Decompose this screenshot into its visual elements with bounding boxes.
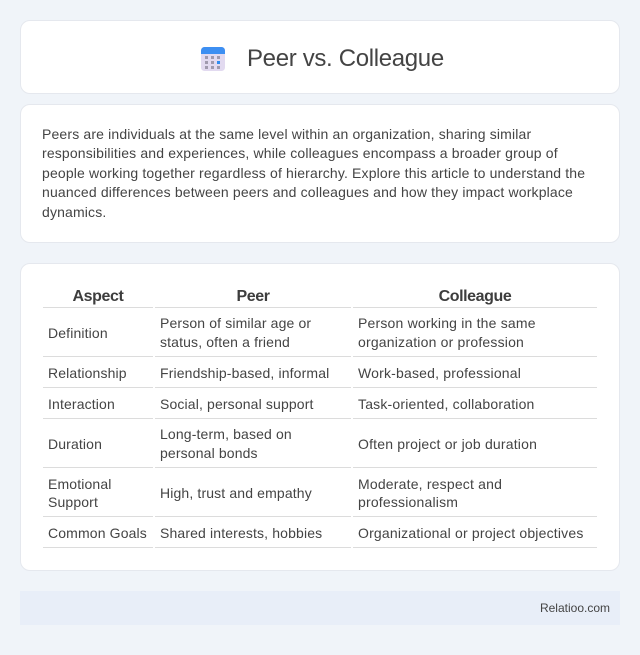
table header: Aspect [73, 288, 123, 305]
row: interaction: Interaction [48, 396, 115, 412]
panel: title card [20, 20, 620, 94]
row: definition: Definition [48, 325, 108, 341]
row: duration: personal bonds [160, 445, 258, 461]
row: interaction: Social, personal support [160, 396, 314, 412]
table header [72, 288, 512, 305]
row: duration [48, 426, 537, 461]
row: common goals [48, 525, 584, 541]
text block: introduction: responsibilities and experiences, while colleagues encompass a broader group of [42, 145, 558, 161]
row: definition: status, often a friend [160, 334, 290, 350]
row: relationship [48, 365, 521, 381]
row: emotional support: Emotional [48, 476, 112, 492]
row: definition [48, 315, 536, 350]
row: emotional support: Moderate, respect and [358, 476, 502, 492]
row: duration: Duration [48, 436, 102, 452]
row: relationship: Work-based, professional [358, 365, 521, 381]
row: emotional support: professionalism [358, 494, 458, 510]
footer credit: Relatioo.com [540, 601, 610, 615]
row: emotional support: High, trust and empathy [160, 485, 312, 501]
row: common goals: Shared interests, hobbies [160, 525, 322, 541]
title: Peer vs. Colleague [247, 45, 444, 72]
text block: introduction [42, 126, 585, 220]
row: common goals: Organizational or project objectives [358, 525, 584, 541]
icon: calendar [201, 47, 225, 71]
text block: introduction: people working together regardless of hierarchy. Explore this article to understand the [42, 165, 585, 181]
row: relationship: Relationship [48, 365, 127, 381]
row: common goals: Common Goals [48, 525, 147, 541]
row: emotional support [48, 476, 502, 510]
panel: introduction [20, 104, 620, 243]
row: relationship: Friendship-based, informal [160, 365, 329, 381]
row: definition: Person working in the same [358, 315, 536, 331]
text block: introduction: dynamics. [42, 204, 106, 220]
row: interaction [48, 396, 535, 412]
row: interaction: Task-oriented, collaboration [358, 396, 535, 412]
footer bar [20, 591, 620, 625]
row: duration: Long-term, based on [160, 426, 292, 442]
text block: introduction: Peers are individuals at the same level within an organization, sharing similar [42, 126, 531, 142]
row: emotional support: Support [48, 494, 98, 510]
table header: Peer [236, 288, 270, 305]
row: definition: organization or profession [358, 334, 524, 350]
row: definition: Person of similar age or [160, 315, 311, 331]
text block: introduction: nuanced differences between peers and colleagues and how they impact workplace [42, 184, 573, 200]
table header: Colleague [439, 288, 511, 305]
panel: comparison table [20, 263, 620, 571]
row: duration: Often project or job duration [358, 436, 537, 452]
